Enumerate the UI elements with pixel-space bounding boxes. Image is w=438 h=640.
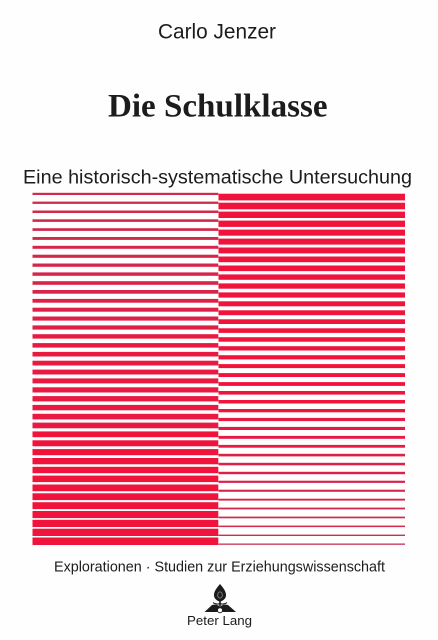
left stripes: thin at top, thick at bottom <box>32 193 218 545</box>
right stripes: thick at top, thin at bottom <box>218 194 405 545</box>
series line: Explorationen · Studien zur Erziehungswissenschaft <box>54 560 385 576</box>
icon: publisher logo <box>204 584 236 613</box>
striped graphic <box>32 193 405 545</box>
subtitle: Eine historisch-systematische Untersuchung <box>23 166 412 188</box>
author name: Carlo Jenzer <box>158 20 276 43</box>
title: Die Schulklasse <box>108 89 328 125</box>
publisher name: Peter Lang <box>187 613 252 628</box>
